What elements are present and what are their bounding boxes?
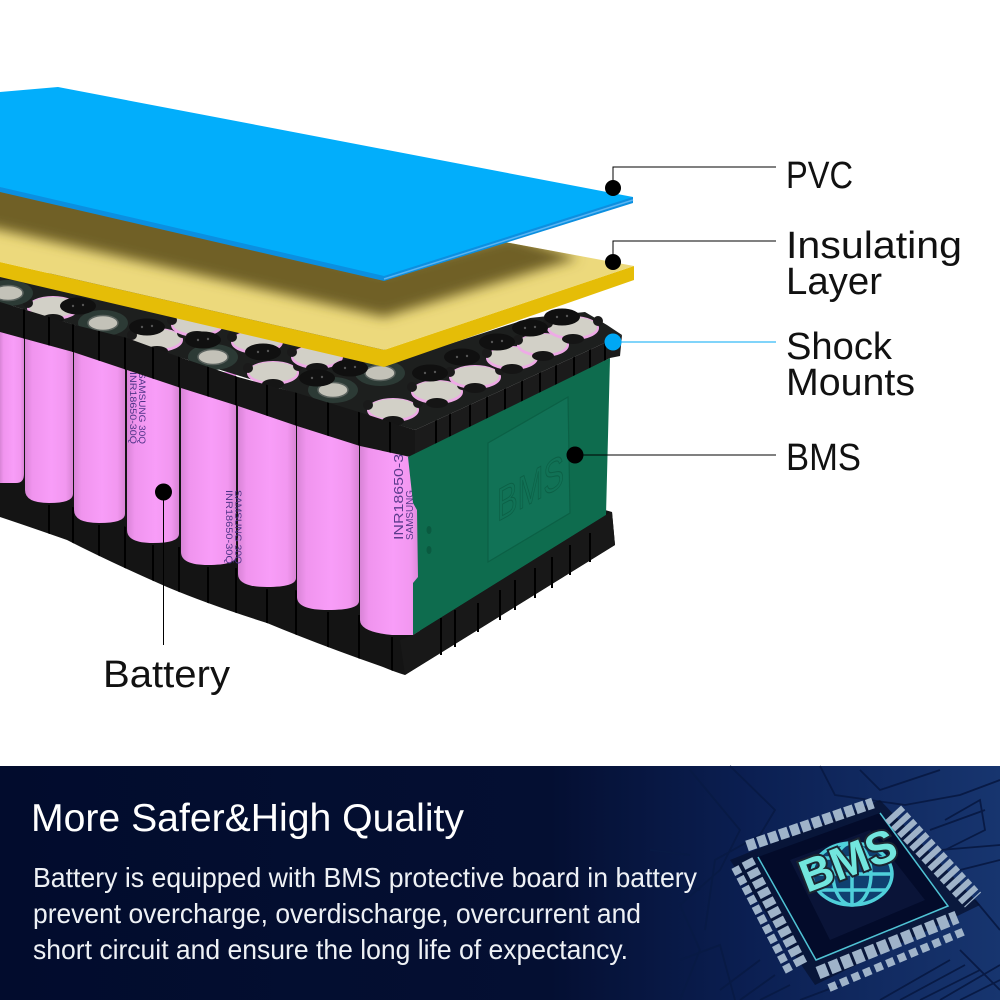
battery pack illustration bbox=[0, 270, 622, 680]
description text: prevent overcharge, overdischarge, overcurrent and bbox=[33, 898, 641, 929]
callout: Insulating Layer: Layer bbox=[786, 261, 882, 303]
cell print: middle marking: INR18650-30Q bbox=[224, 490, 234, 564]
callout: Insulating Layer: Insulating bbox=[786, 225, 962, 267]
cell tops bbox=[0, 280, 603, 426]
front top holder band bbox=[0, 302, 415, 458]
cell print: Samsung marking second line: SAMSUNG bbox=[405, 490, 416, 540]
panel: bottom info band bbox=[0, 766, 1000, 1000]
bottom holder frame bbox=[0, 330, 615, 675]
description text: short circuit and ensure the long life of expectancy. bbox=[33, 934, 628, 965]
side top holder band bbox=[415, 335, 622, 458]
bottom holder grooves bbox=[49, 505, 392, 680]
callout: BMS bbox=[566, 437, 861, 479]
cast shadow from PVC sheet bbox=[0, 192, 580, 325]
callout: Shock Mounts: Shock bbox=[786, 326, 893, 368]
embossed BMS text: BMS bbox=[497, 444, 564, 532]
description text: Battery is equipped with BMS protective board in battery bbox=[33, 862, 697, 893]
callout: Shock Mounts bbox=[604, 326, 915, 404]
chip pins bbox=[735, 803, 973, 988]
callout: Shock Mounts: Mounts bbox=[786, 362, 915, 404]
icon: BMS chip bbox=[730, 800, 980, 988]
battery cells bbox=[0, 320, 420, 635]
cell print: Samsung marking: INR18650-30 bbox=[391, 445, 406, 540]
cell print: left marking: INR18650-30Q bbox=[128, 372, 138, 444]
callout: BMS: BMS bbox=[786, 437, 861, 479]
callout: PVC bbox=[605, 155, 853, 197]
globe bbox=[812, 843, 892, 905]
PVC sheet: blue layer bbox=[0, 87, 633, 281]
circuit board traces bbox=[650, 766, 1000, 1000]
insulating layer: yellow sheet bbox=[0, 192, 634, 367]
board indicator holes bbox=[426, 526, 432, 554]
cell print: middle marking second line: SAMSUNG 30Q bbox=[233, 490, 243, 564]
description text bbox=[33, 862, 697, 965]
bottom side holder bbox=[400, 512, 615, 675]
callout: Battery bbox=[103, 484, 230, 696]
BMS logo text: BMS bbox=[792, 818, 904, 902]
callout: Battery: Battery bbox=[103, 654, 230, 696]
top band grooves bbox=[24, 305, 605, 458]
BMS circuit board bbox=[408, 358, 610, 635]
top holder surface bbox=[0, 270, 622, 430]
callout: Insulating Layer bbox=[605, 225, 962, 303]
BMS chip cover plate bbox=[488, 397, 570, 562]
heading: More Safer&High Quality bbox=[31, 797, 465, 840]
cell print: left marking second line: SAMSUNG 30Q bbox=[137, 372, 147, 444]
callout: PVC: PVC bbox=[786, 155, 853, 197]
